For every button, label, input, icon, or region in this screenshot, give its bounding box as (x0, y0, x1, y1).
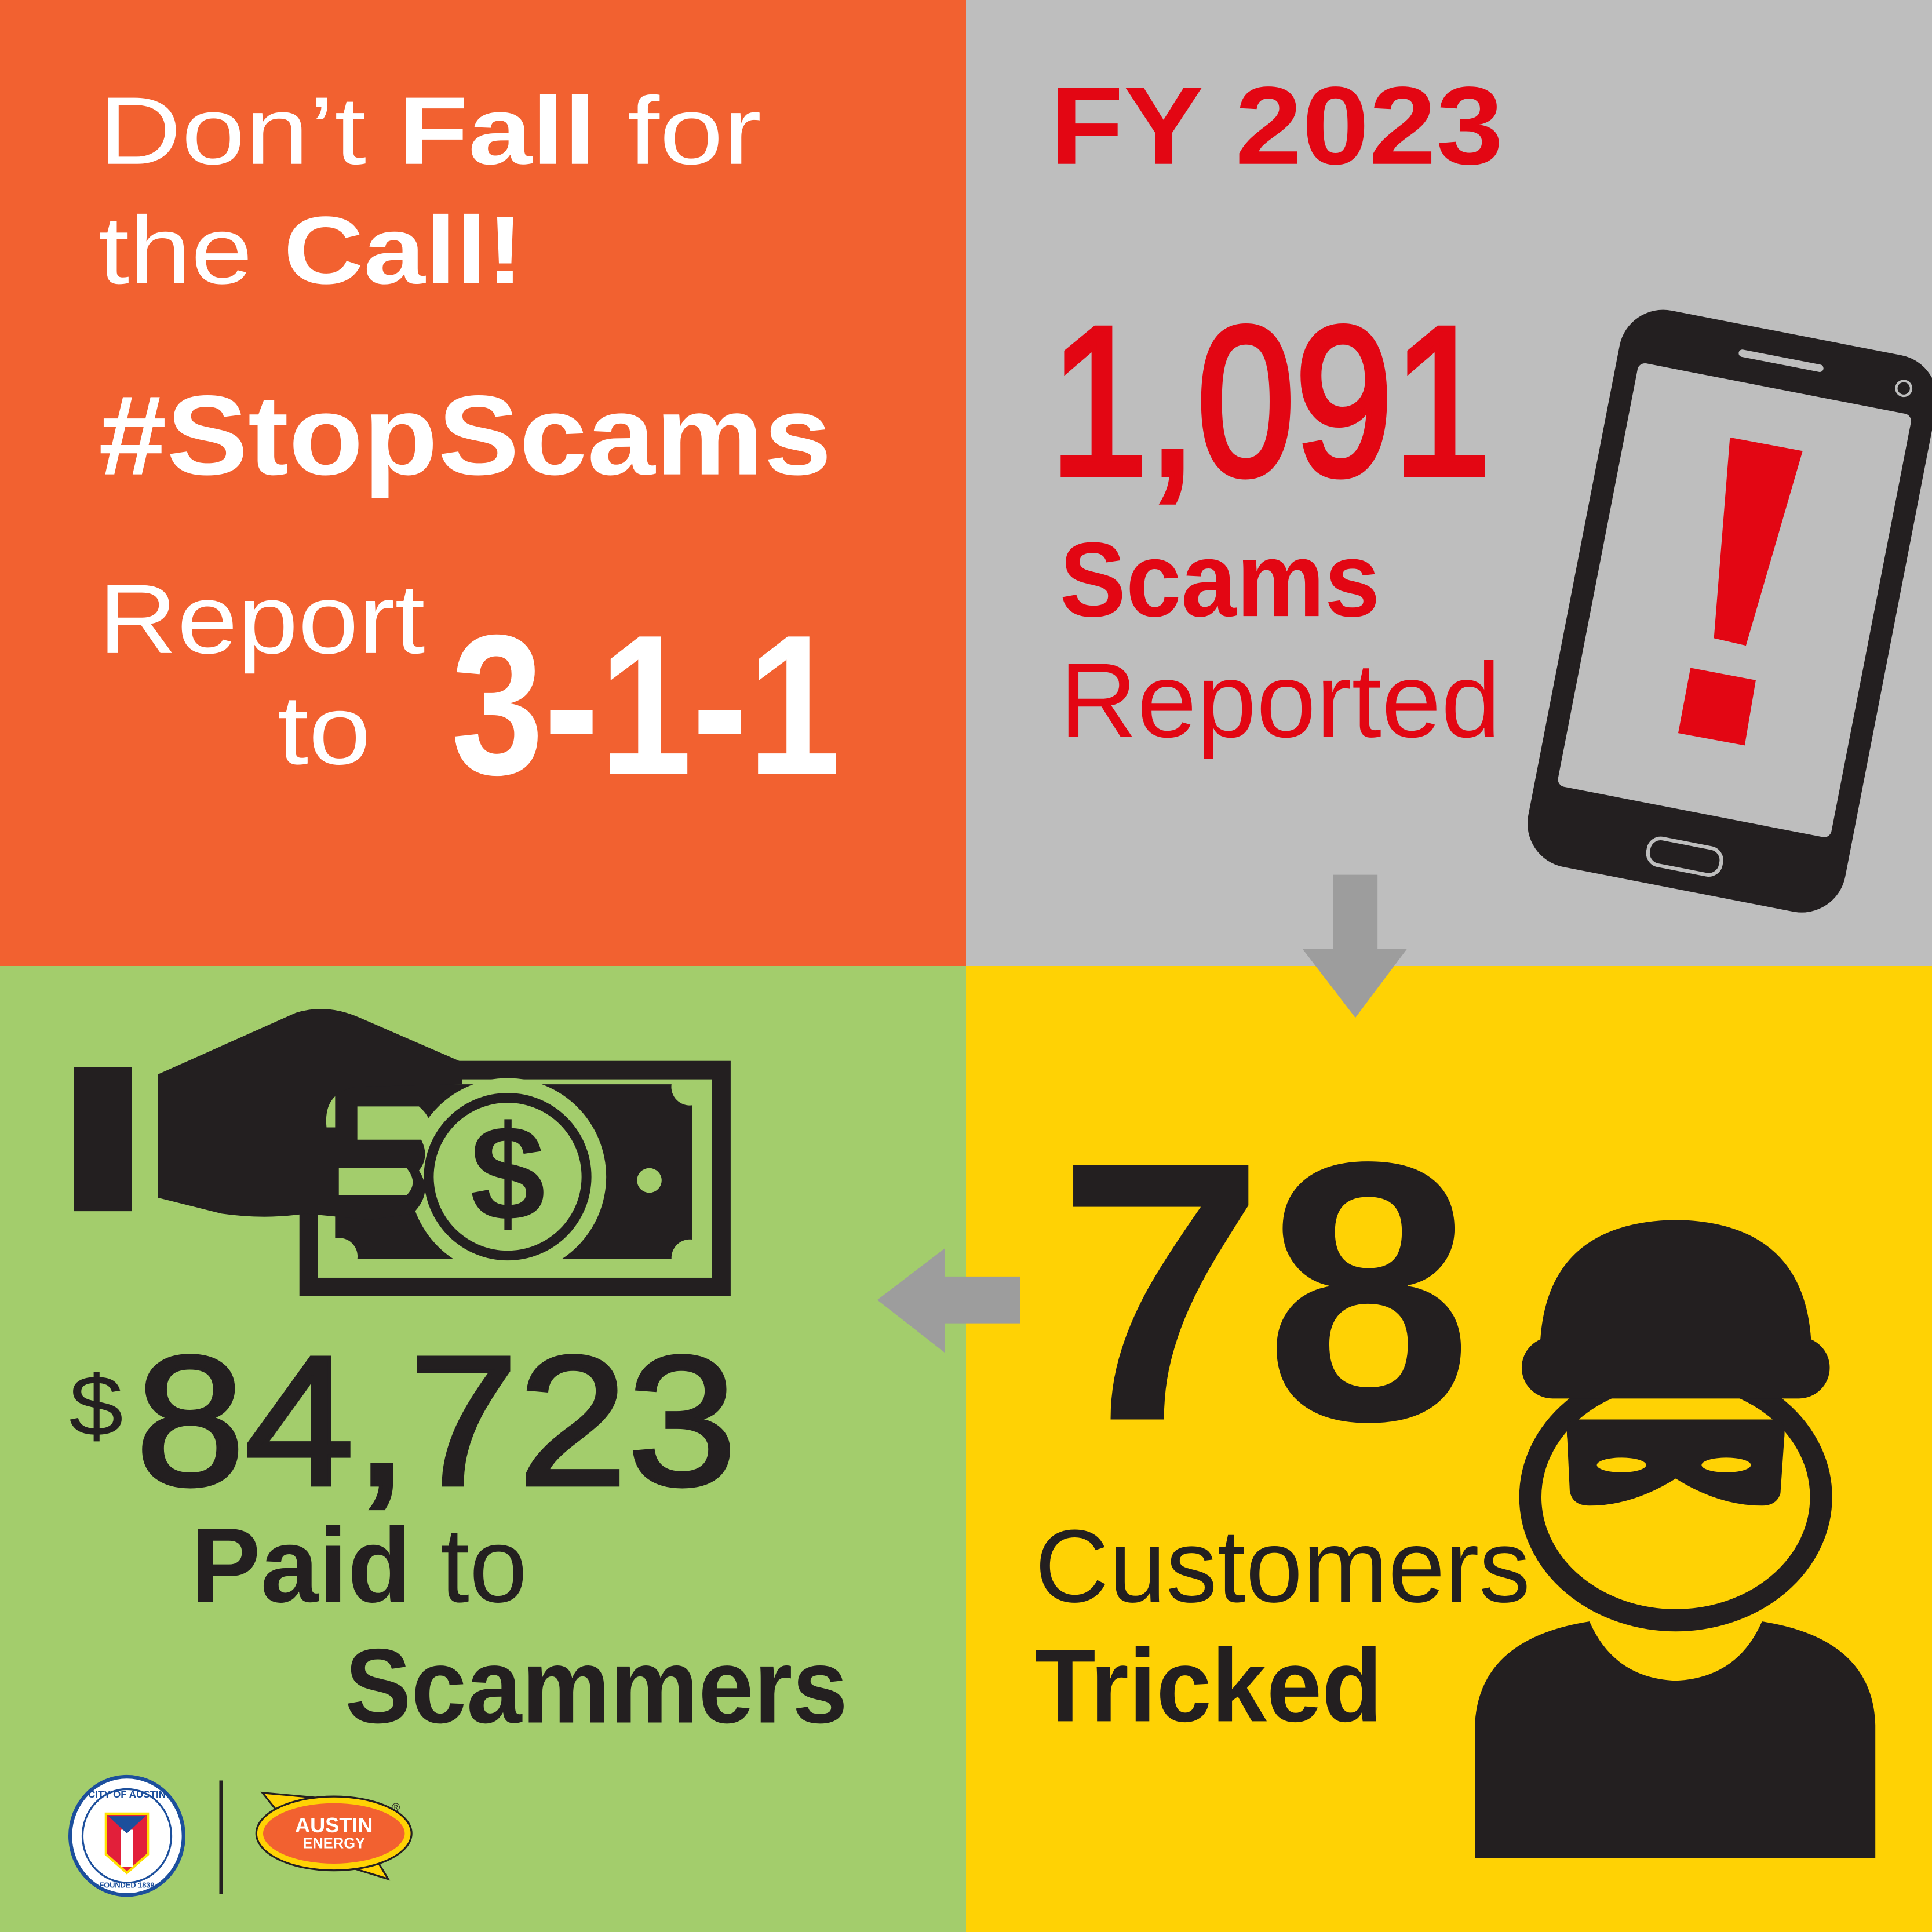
logo: City of Austin seal: FOUNDED 1839 (100, 1880, 154, 1889)
stat: 1,091 scams reported (1050, 283, 1501, 760)
stat: $84,723 paid to scammers (69, 1317, 848, 1745)
logo: City of Austin seal: CITY OF AUSTIN (88, 1789, 166, 1800)
stat: $84,723 paid to scammers: 84,723 (136, 1317, 737, 1524)
stat: 1,091 scams reported: Scams (1060, 520, 1380, 639)
icon: hand with money (74, 1009, 731, 1296)
logo: Austin Energy: ENERGY (302, 1835, 365, 1851)
logo: Austin Energy: AUSTIN (295, 1813, 373, 1837)
stat: 78 customers tricked: Customers (1035, 1508, 1530, 1624)
report to 3-1-1 (99, 564, 840, 816)
stat: 78 customers tricked: Tricked (1035, 1627, 1383, 1743)
icon: phone with alert (1520, 302, 1932, 920)
logo: City of Austin seal (70, 1777, 184, 1895)
logo: Austin Energy: ® (392, 1802, 400, 1814)
icon: hand with money: $ (470, 1097, 545, 1249)
stat: $84,723 paid to scammers: Paid to (191, 1505, 527, 1624)
stat: 1,091 scams reported: Reported (1060, 641, 1501, 760)
report to 3-1-1: Report (99, 564, 425, 675)
report to 3-1-1: 3-1-1 (451, 593, 840, 816)
hashtag: #StopScams (99, 373, 832, 499)
icon: burglar (1475, 1220, 1875, 1858)
year heading: FY 2023 (1050, 64, 1503, 188)
panel: green money paid (0, 966, 966, 1932)
title: Don’t Fall for (99, 78, 761, 185)
title: the Call! (99, 197, 524, 304)
title (99, 78, 761, 304)
stat: 1,091 scams reported: 1,091 (1050, 283, 1491, 520)
panel: orange call to action (0, 0, 966, 966)
divider (219, 1780, 223, 1894)
arrow: down from phone to customers (1302, 875, 1407, 1018)
stat: 78 customers tricked: 78 (1057, 1085, 1472, 1498)
panel: gray scams reported (966, 0, 1932, 966)
logo: Austin Energy (256, 1793, 411, 1879)
arrow: left from customers to money (877, 1248, 1020, 1353)
stat: $84,723 paid to scammers: Scammers (345, 1627, 848, 1745)
stat: 78 customers tricked (1035, 1085, 1530, 1743)
panel: yellow customers tricked (966, 966, 1932, 1932)
report to 3-1-1: to (277, 675, 371, 785)
stat: $84,723 paid to scammers: $ (69, 1357, 123, 1454)
